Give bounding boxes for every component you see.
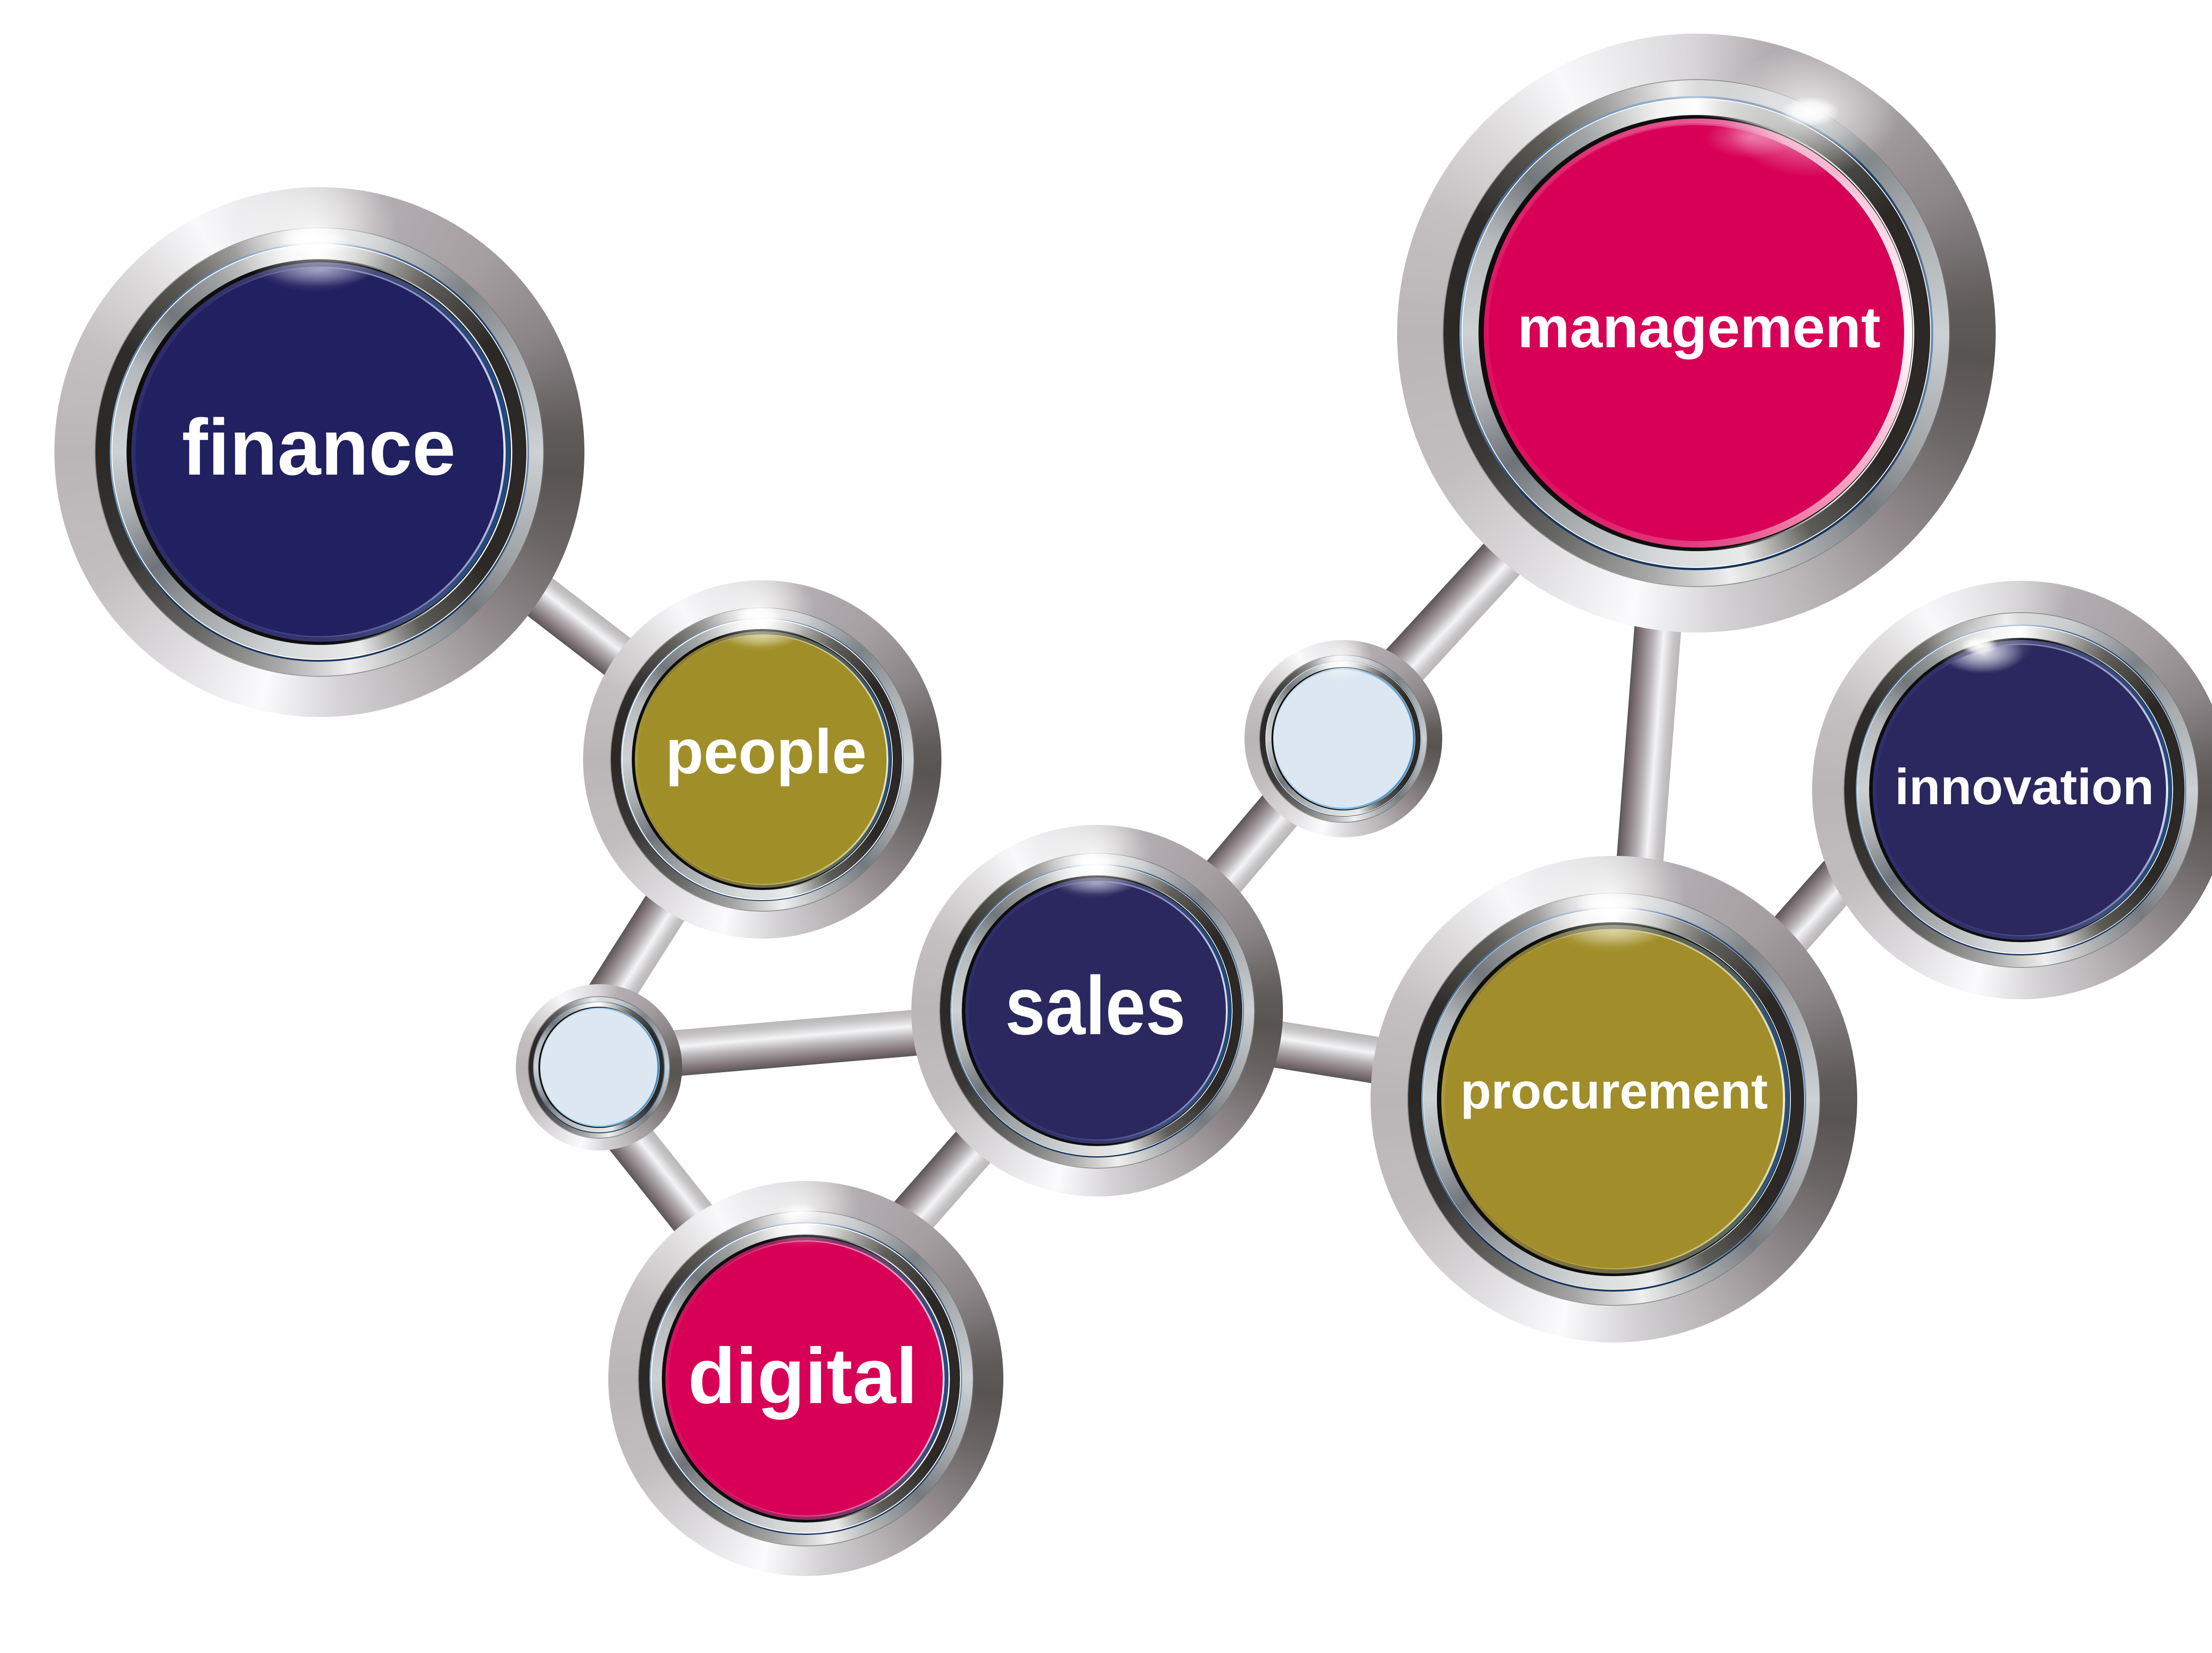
pale disc (1244, 640, 1442, 837)
highlight (1812, 581, 2212, 999)
label: finance: finance (182, 403, 456, 492)
metal bezel (1371, 856, 1857, 1342)
metal bezel (516, 984, 682, 1151)
highlight (1244, 640, 1442, 837)
crimson disc (1397, 34, 1996, 633)
node: procurement (1371, 856, 1857, 1342)
metal bezel (911, 825, 1283, 1197)
node: finance (54, 187, 584, 717)
node: digital (608, 1181, 1003, 1576)
metal bezel (1244, 640, 1442, 837)
label: sales: sales (1005, 959, 1186, 1052)
navy disc (1812, 581, 2212, 999)
label: management: management (1517, 295, 1881, 360)
navy disc (54, 187, 584, 717)
navy disc (911, 825, 1283, 1197)
crimson disc (608, 1181, 1003, 1576)
highlight (1371, 856, 1857, 1342)
node: small connector one (516, 984, 682, 1151)
highlight (608, 1181, 1003, 1576)
metal bezel (1397, 34, 1996, 633)
node: management (1397, 34, 1996, 633)
metal bezel (54, 187, 584, 717)
highlight (54, 187, 584, 717)
metal bezel (1812, 581, 2212, 999)
highlight (911, 825, 1283, 1197)
highlight (583, 580, 941, 939)
metal bezel (583, 580, 941, 939)
label: innovation: innovation (1895, 759, 2154, 815)
node: people (583, 580, 941, 939)
highlight (1397, 34, 1996, 633)
metal bezel (608, 1181, 1003, 1576)
label: people: people (665, 717, 867, 787)
node: sales (911, 825, 1283, 1197)
node: innovation (1812, 581, 2212, 999)
olive disc (583, 580, 941, 939)
node: small connector two (1244, 640, 1442, 837)
label: procurement: procurement (1460, 1063, 1768, 1120)
olive disc (1371, 856, 1857, 1342)
pale disc (516, 984, 682, 1151)
label: digital: digital (688, 1332, 918, 1420)
